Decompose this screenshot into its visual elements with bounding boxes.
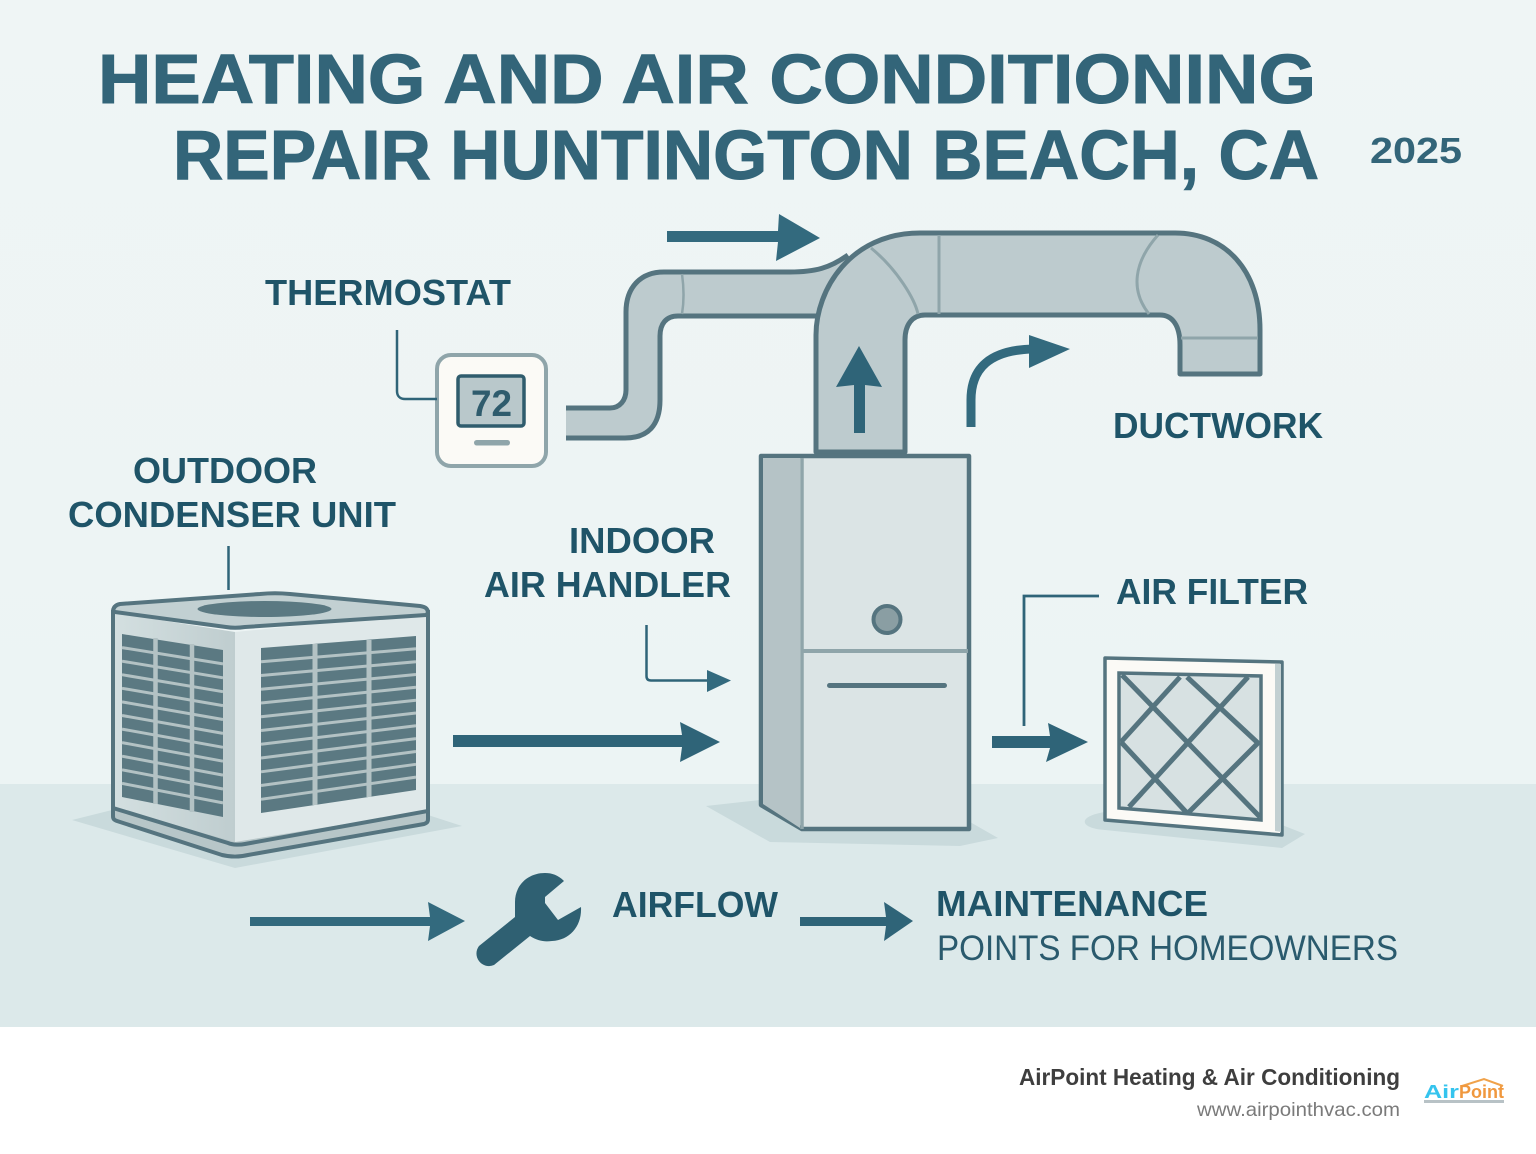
icon: wrench — [476, 873, 581, 966]
condenser leader line — [227, 546, 230, 590]
maintenance label: POINTS FOR HOMEOWNERS — [937, 929, 1398, 968]
arrow: to wrench — [250, 902, 465, 941]
footer website: www.airpointhvac.com — [1196, 1099, 1400, 1121]
top panel — [113, 593, 428, 628]
arrow: to air filter — [992, 723, 1088, 762]
maintenance label — [936, 883, 1398, 968]
thermostat: 72 — [471, 383, 512, 424]
handle — [827, 683, 947, 688]
side panel — [763, 458, 800, 828]
logo: Point — [1459, 1082, 1504, 1102]
side outline — [113, 610, 428, 845]
indoor air handler label: AIR HANDLER — [484, 564, 731, 605]
thermostat leader line — [397, 330, 437, 399]
footer company name: AirPoint Heating & Air Conditioning — [1019, 1064, 1400, 1090]
logo: Air — [1424, 1082, 1459, 1102]
main duct — [816, 233, 1260, 452]
indoor air handler label: INDOOR — [569, 520, 715, 561]
outdoor condenser label: OUTDOOR — [133, 450, 317, 491]
outdoor condenser label — [68, 450, 396, 535]
arrow: condenser to air handler — [453, 722, 720, 762]
outdoor condenser unit — [113, 593, 428, 856]
indoor air handler label — [484, 520, 731, 605]
fan opening — [198, 601, 332, 617]
airflow label: AIRFLOW — [612, 884, 778, 925]
arrow: up in duct — [836, 346, 882, 433]
floor — [0, 784, 1536, 1027]
ductwork — [566, 233, 1260, 452]
year: 2025 — [1370, 130, 1462, 171]
air filter leader line — [1024, 596, 1099, 726]
right face — [235, 613, 426, 842]
thermostat — [437, 355, 546, 466]
left grille — [122, 634, 223, 817]
panel divider — [803, 649, 968, 653]
title: REPAIR HUNTINGTON BEACH, CA — [173, 116, 1319, 194]
arrow: top duct airflow — [667, 214, 820, 261]
thermostat label: THERMOSTAT — [265, 272, 511, 313]
small duct — [566, 255, 848, 438]
logo — [1424, 1079, 1504, 1103]
arrow: to maintenance — [800, 902, 913, 941]
indoor air handler unit — [761, 456, 969, 829]
footer band — [0, 1027, 1536, 1154]
right grille — [261, 636, 416, 813]
ductwork label: DUCTWORK — [1113, 405, 1323, 446]
maintenance label: MAINTENANCE — [936, 883, 1208, 924]
floor shadows — [72, 800, 1305, 868]
outdoor condenser label: CONDENSER UNIT — [68, 494, 396, 535]
base — [113, 800, 428, 856]
arrow: curved supply — [971, 335, 1070, 427]
knob — [874, 606, 900, 633]
air filter — [1105, 658, 1282, 835]
title: HEATING AND AIR CONDITIONING — [98, 40, 1316, 118]
arrow: air handler leader — [646, 625, 731, 692]
title — [98, 40, 1319, 194]
background wall — [0, 0, 1536, 784]
air filter label: AIR FILTER — [1116, 571, 1308, 612]
left face — [115, 613, 235, 842]
